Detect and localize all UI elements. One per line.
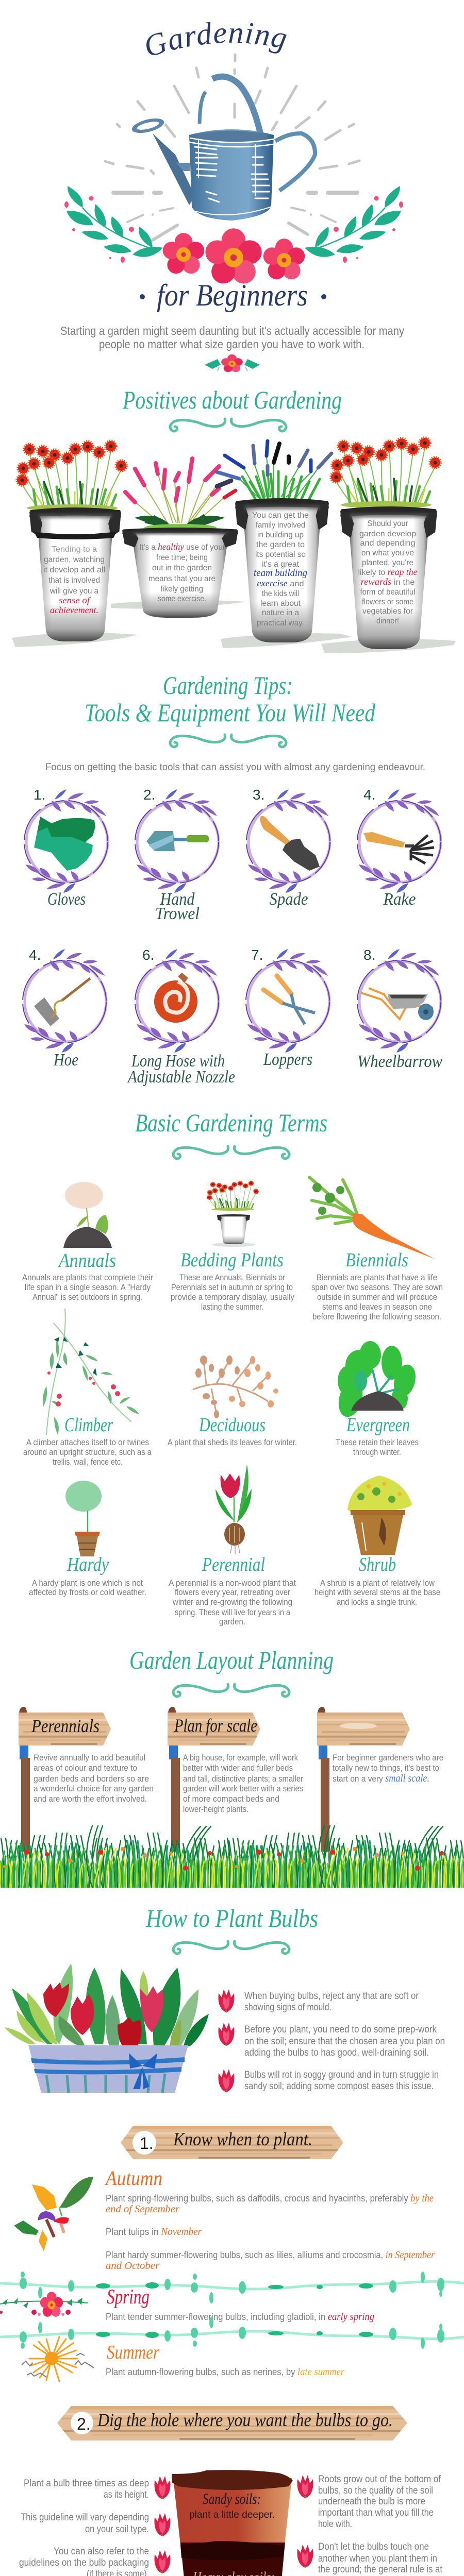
left soil tips: guidelines on the bulb packaging — [19, 2557, 149, 2568]
heading: Garden Layout Planning: Garden Layout Planning — [129, 1646, 334, 1674]
intro text: people no matter what size garden you have to work with. — [99, 337, 364, 351]
term: perennial: flowers every year, retreating over — [175, 1587, 290, 1597]
panel: pot 3: learn about — [260, 599, 301, 608]
tool 2: hand trowel: Hand — [160, 890, 195, 909]
right soil tips: Roots grow out of the bottom of — [318, 2474, 441, 2485]
sign 2: plan for scale: and tall, distinctive plants; a smaller — [183, 1774, 303, 1784]
term: hardy: Hardy — [67, 1554, 109, 1575]
vine divider — [0, 2317, 464, 2349]
right soil tips: important than what you fill the — [318, 2507, 434, 2518]
tool 4: rake — [357, 787, 441, 909]
step banner 1 — [121, 2126, 343, 2159]
sign 2: plan for scale: lower-height plants. — [183, 1804, 248, 1814]
flourish — [170, 735, 286, 747]
term: biennials — [309, 1177, 443, 1321]
bulb tips: Before you plant, you need to do some prep-work — [244, 2024, 437, 2035]
term: evergreen — [335, 1341, 419, 1457]
season: autumn: end of September — [106, 2204, 179, 2215]
panel: pot 2 plant — [125, 459, 236, 531]
sign 2: plan for scale: A big house, for example, will work — [183, 1753, 298, 1762]
panel: pot 1 plant — [16, 440, 127, 512]
heading: Basic Gardening Terms: Basic Gardening Terms — [135, 1108, 327, 1137]
tool 5: hoe: Hoe — [53, 1050, 78, 1070]
term: bedding plants — [171, 1181, 294, 1312]
tool 1: gloves — [24, 787, 108, 909]
term: biennials: stems and leaves in season one — [322, 1302, 432, 1312]
season: summer — [22, 2337, 344, 2381]
step banner 2 — [57, 2406, 407, 2441]
pot shadows — [12, 600, 456, 653]
panel: pot 4 plant — [330, 437, 441, 509]
right soil tips: the ground; the general rule is at — [318, 2564, 443, 2575]
tool 7: loppers: Loppers — [263, 1050, 312, 1069]
tool 6: long hose: 6. — [142, 947, 154, 963]
panel: pot 2: likely getting — [161, 585, 203, 594]
panel: pot 4: on what you've — [361, 549, 414, 557]
panel: pot 2: It's a healthy use of your — [139, 541, 226, 552]
panel: pot 4: dinner! — [376, 617, 399, 625]
illustration: tulip bucket — [5, 1963, 209, 2093]
panel: pot 1: garden, watching — [44, 555, 105, 564]
tool 6: long hose: Adjustable Nozzle — [127, 1067, 235, 1087]
heading: How to Plant Bulbs: How to Plant Bulbs — [145, 1904, 318, 1933]
sign 1: perennials: Perennials — [31, 1716, 100, 1736]
left soil tips: This guideline will vary depending — [21, 2512, 149, 2523]
grass band 1 — [0, 1826, 464, 1887]
panel: pot 4: garden develop — [359, 530, 416, 538]
panel: pot 1: sense of — [59, 595, 91, 605]
sign 2: plan for scale: of more compact beds and — [183, 1794, 279, 1804]
term: annuals — [22, 1182, 153, 1302]
term: shrub — [314, 1476, 440, 1607]
term: perennial — [169, 1464, 296, 1626]
left soil tips: You can also refer to the — [54, 2546, 149, 2557]
tool 8: wheelbarrow: Wheelbarrow — [357, 1052, 442, 1071]
panel: pot 2: free time; being — [156, 553, 208, 562]
term: deciduous: A plant that sheds its leaves for winter. — [168, 1437, 297, 1447]
panel: pot 4 — [340, 506, 437, 649]
term: hardy: affected by frosts or cold weather. — [29, 1587, 146, 1597]
panel: pot 4: rewards in the — [361, 577, 415, 587]
panel: pot 3: exercise and — [257, 578, 304, 588]
panel: pot 2: some exercise. — [158, 595, 206, 603]
term: climber: around an upright structure, such as a — [23, 1447, 152, 1457]
intro text — [60, 324, 404, 351]
season: autumn: Plant spring-flowering bulbs, such as daffodils, crocus and hyacinths, preferably by the — [106, 2193, 434, 2204]
red flowers — [163, 228, 305, 283]
term: climber: trellis, wall, fence etc. — [53, 1457, 123, 1467]
season: spring — [0, 2285, 374, 2323]
panel: pot 3: in building up — [257, 531, 304, 539]
left soil tips — [19, 2476, 170, 2576]
term: deciduous — [168, 1355, 297, 1447]
panel: pot 4: and depending — [360, 539, 416, 548]
term: biennials: Biennials are plants that have a life — [317, 1273, 437, 1282]
bulb tips: showing signs of mould. — [244, 2002, 332, 2013]
term: hardy — [29, 1481, 146, 1597]
sign 2: plan for scale: better with wider and fuller beds — [183, 1763, 293, 1773]
tool 7: loppers: 7. — [251, 947, 263, 963]
panel: pot 2 — [122, 528, 238, 618]
panel: pot 3: practical way. — [257, 619, 304, 628]
tool 3: spade: 3. — [253, 787, 264, 803]
panel: pot 3: nature in a — [262, 608, 299, 617]
tool 8: wheelbarrow — [357, 947, 442, 1071]
sign 2: plan for scale: garden will work better with a series — [183, 1784, 303, 1793]
panel: pot 1: achievement. — [50, 605, 98, 615]
term: bedding plants: Bedding Plants — [180, 1249, 284, 1271]
term: evergreen: through winter. — [353, 1447, 401, 1457]
panel: pot 3: team building — [254, 568, 307, 579]
tools intro: Focus on getting the basic tools that can assist you with almost any gardening endeavour. — [45, 762, 425, 773]
sign 3: small scale: totally new to things, it's best to — [333, 1763, 439, 1773]
season: summer: Summer — [107, 2342, 159, 2363]
season: autumn: Autumn — [104, 2166, 162, 2190]
tool 5: hoe — [23, 947, 106, 1070]
flourish — [173, 1146, 289, 1159]
right soil tips: underneath the bulb is more — [318, 2496, 425, 2507]
step banner 1: 1. — [140, 2134, 154, 2153]
tool 2: hand trowel: 2. — [143, 787, 155, 803]
tool 7: loppers — [246, 947, 329, 1069]
right soil tips: another when you plant them in — [318, 2553, 437, 2564]
left soil tips: Plant a bulb three times as deep — [24, 2478, 149, 2489]
panel: pot 2: out in the garden — [152, 564, 212, 572]
flourish — [170, 419, 286, 431]
tool 3: spade: Spade — [269, 890, 308, 909]
soil layers chart — [172, 2470, 293, 2576]
panel: pot 4: planted, you're — [362, 558, 413, 567]
step banner 2: 2. — [77, 2415, 91, 2433]
laurel right — [305, 186, 403, 263]
sign 3: small scale: For beginner gardeners who are — [333, 1753, 443, 1762]
term: bedding plants: lasting the summer. — [201, 1302, 263, 1312]
tool 5: hoe: 4. — [29, 947, 41, 963]
intro text: Starting a garden might seem daunting but it's actually accessible for many — [60, 324, 404, 337]
step banner 1: Know when to plant. — [173, 2129, 312, 2149]
sign 3: small scale — [317, 1707, 443, 1852]
heading: Gardening Tips: Tools & Equipment You Will Need — [85, 698, 376, 727]
tool 2: hand trowel: Trowel — [155, 904, 200, 923]
term: evergreen: Evergreen — [346, 1414, 410, 1436]
left soil tips: as its height. — [104, 2489, 149, 2500]
bulb tips: Bulbs will rot in soggy ground and in turn struggle in — [244, 2070, 439, 2080]
term: perennial: winter and re-growing the following — [172, 1597, 292, 1607]
panel: pot 1: it develop and all — [43, 566, 105, 574]
heading: Gardening Tips — [85, 671, 376, 727]
panel: pot 1: will give you a — [49, 587, 98, 596]
panel: pot 3 plant — [217, 441, 332, 499]
term: annuals: Annuals are plants that complete their — [22, 1273, 153, 1282]
sign 2: plan for scale — [168, 1707, 303, 1852]
sign 1: perennials: areas of colour and texture to — [34, 1763, 137, 1773]
sign 2: plan for scale: Plan for scale — [174, 1715, 257, 1736]
sunburst rays — [105, 55, 359, 240]
step banner 2: Dig the hole where you want the bulbs to go. — [97, 2410, 393, 2430]
bulb tips: on the soil; ensure that the chosen area you plan on — [244, 2036, 445, 2047]
season: autumn: and October — [106, 2260, 159, 2272]
term: climber — [23, 1309, 152, 1467]
panel: pot 4: Should your — [367, 519, 408, 528]
term: shrub: Shrub — [359, 1554, 396, 1575]
term: biennials: span over two seasons. They are sown — [311, 1282, 443, 1292]
bulb tips: adding the bulbs to has good, well-draining soil. — [244, 2047, 429, 2058]
term: annuals: Annual" is set outdoors in spring. — [32, 1292, 142, 1302]
bulb tips — [219, 1989, 445, 2093]
term: climber: A climber attaches itself to or twines — [26, 1437, 149, 1447]
laurel left — [64, 186, 163, 263]
tool 4: rake: Rake — [383, 890, 416, 909]
term: climber: Climber — [64, 1414, 113, 1436]
tool 1: gloves: 1. — [34, 787, 45, 803]
tool 6: long hose — [127, 947, 235, 1087]
term: perennial: A perennial is a non-wood plant that — [169, 1578, 296, 1588]
term: biennials: outside in summer and will produce — [317, 1292, 437, 1302]
sign 1: perennials: garden beds and borders so are — [34, 1774, 149, 1784]
term: bedding plants: Perennials set in autumn or spring to — [171, 1282, 293, 1292]
season: autumn — [14, 2166, 435, 2272]
panel: pot 3: the kids will — [262, 589, 299, 598]
heading: Positives about Gardening: Positives about Gardening — [122, 385, 342, 414]
term: bedding plants: These are Annuals, Biennials or — [179, 1273, 285, 1282]
panel: pot 2: means that you are — [148, 574, 216, 583]
panel: pot 3: You can get the — [252, 511, 309, 520]
term: perennial: garden. — [219, 1617, 245, 1626]
bulb tips: When buying bulbs, reject any that are soft or — [244, 1991, 419, 2002]
season: autumn: Plant hardy summer-flowering bulbs, such as lilies, alliums and crocosmia, in September — [106, 2249, 435, 2261]
flourish — [173, 1941, 289, 1954]
panel: pot 4: form of beautiful — [360, 588, 416, 597]
soil layers chart: plant a little deeper. — [189, 2510, 275, 2520]
vine divider — [0, 2272, 464, 2303]
term: shrub: and locks a single trunk. — [337, 1597, 417, 1607]
icon: watering can — [130, 77, 315, 221]
panel: pot 1 — [29, 507, 121, 641]
sign 1: perennials: Revive annually to add beautiful — [34, 1753, 145, 1762]
term: hardy: A hardy plant is one which is not — [32, 1578, 143, 1588]
term: bedding plants: provide a temporary display, usually — [171, 1292, 294, 1302]
term: shrub: height with several stems at the base — [314, 1587, 440, 1597]
panel: pot 3: family involved — [256, 521, 305, 530]
sign 1: perennials: a wonderful choice for any garden — [34, 1784, 154, 1793]
term: biennials: Biennials — [345, 1249, 408, 1271]
term: shrub: A shrub is a plant of relatively low — [320, 1578, 435, 1588]
panel: pot 4: vegetables for — [362, 607, 413, 616]
panel: pot 3 — [235, 498, 329, 642]
season: spring: Spring — [107, 2285, 150, 2308]
tool 3: spade — [246, 787, 330, 909]
right soil tips: hole with. — [318, 2519, 352, 2530]
right soil tips: bulbs, so the quality of the soil — [318, 2485, 433, 2496]
tool 1: gloves: Gloves — [47, 890, 86, 909]
term: perennial: spring. These will live for years in a — [175, 1607, 290, 1617]
tool 6: long hose: Long Hose with — [131, 1052, 225, 1071]
heading: Gardening Tips: Gardening Tips: — [163, 671, 293, 700]
season: spring: Plant tender summer-flowering bulbs, including gladioli, in early spring — [106, 2311, 374, 2323]
flourish — [173, 1684, 289, 1697]
panel: pot 1: that is involved — [48, 576, 100, 585]
panel: pot 3: the garden to — [256, 540, 305, 549]
tool 2: hand trowel — [135, 787, 219, 923]
season: summer: Plant autumn-flowering bulbs, such as nerines, by late summer — [106, 2366, 344, 2378]
right soil tips: Don't let the bulbs touch one — [318, 2541, 429, 2552]
panel: pot 4: flowers or some — [362, 598, 413, 606]
season: autumn: Plant tulips in November — [106, 2226, 202, 2238]
term: deciduous: Deciduous — [198, 1414, 266, 1436]
ornament: pink flower — [205, 354, 260, 372]
bulb tips: sandy soil; adding some compost eases this issue. — [244, 2081, 434, 2092]
left soil tips: on your soil type. — [85, 2524, 149, 2535]
title: Gardening: Gardening — [146, 22, 287, 55]
term: perennial: Perennial — [202, 1554, 265, 1575]
panel: pot 4: likely to reap the — [358, 567, 418, 577]
panel: pot 3: its potential so — [255, 550, 306, 559]
soil layers chart: Sandy soils: — [203, 2490, 261, 2507]
sign 1: perennials: and are worth the effort involved. — [34, 1794, 147, 1804]
panel: pot 1: Tending to a — [52, 545, 97, 554]
panel: pot 3: it's a great — [262, 560, 300, 569]
sign 1: perennials — [19, 1707, 154, 1852]
term: annuals: life span in a single season. A "Hardy — [25, 1282, 151, 1292]
subtitle: for Beginners: for Beginners — [157, 278, 308, 312]
term: biennials: before flowering the following season. — [312, 1312, 441, 1321]
right soil tips — [297, 2474, 443, 2576]
tool 8: wheelbarrow: 8. — [363, 947, 375, 963]
term: annuals: Annuals — [57, 1250, 116, 1272]
sign 3: small scale: start on a very small scale. — [333, 1773, 429, 1784]
term: evergreen: These retain their leaves — [336, 1437, 419, 1447]
tool 4: rake: 4. — [363, 787, 375, 803]
